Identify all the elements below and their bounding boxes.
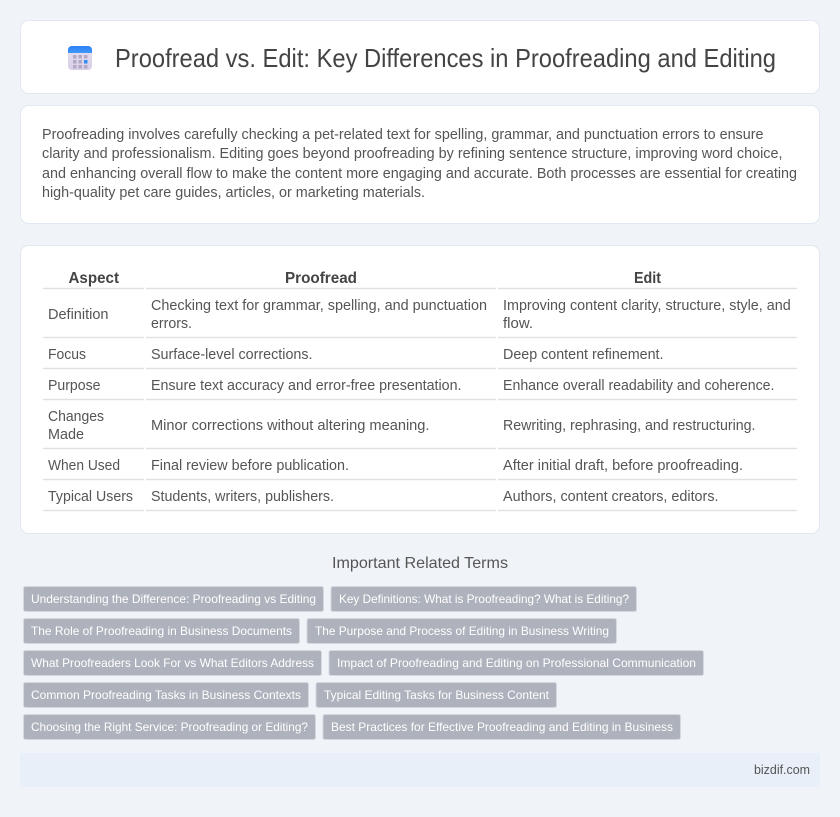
row: definition: errors.	[151, 316, 192, 332]
row: purpose: Ensure text accuracy and error-free presentation.	[151, 378, 462, 394]
tag row 1	[24, 586, 636, 612]
tag row 5	[24, 714, 680, 740]
panel: comparison table	[20, 246, 820, 534]
panel: introduction: and enhancing overall flow to make the content more engaging and accurate. Both processes are essential for creating	[42, 166, 797, 182]
table header: Proofread	[285, 270, 357, 287]
icon: calendar	[68, 46, 92, 70]
row: focus: Focus	[48, 347, 86, 363]
footer: bizdif.com	[754, 762, 810, 777]
tag row 1: Understanding the Difference: Proofreading vs Editing	[31, 592, 316, 606]
row: when used: When Used	[48, 458, 120, 474]
tag row 2: The Role of Proofreading in Business Documents	[31, 624, 292, 638]
title: Proofread vs. Edit: Key Differences in Proofreading and Editing	[115, 45, 776, 73]
table header: Aspect	[68, 270, 120, 287]
row: changes made	[48, 409, 756, 443]
row: typical users	[48, 489, 718, 505]
row: purpose: Purpose	[48, 378, 100, 394]
row: focus	[48, 347, 664, 363]
tag row 4: Typical Editing Tasks for Business Content	[324, 688, 550, 702]
heading: important related terms: Important Related Terms	[332, 555, 508, 572]
row: definition: Checking text for grammar, spelling, and punctuation	[151, 298, 487, 314]
panel: introduction: Proofreading involves carefully checking a pet-related text for spelling, grammar, and punctuation errors to ensure	[42, 127, 764, 143]
tag row 5: Best Practices for Effective Proofreading and Editing in Business	[331, 720, 673, 734]
table header	[68, 270, 662, 287]
row: focus: Surface-level corrections.	[151, 347, 312, 363]
panel: introduction: high-quality pet care guides, articles, or marketing materials.	[42, 185, 425, 201]
row: when used	[48, 458, 743, 474]
row: changes made: Made	[48, 427, 84, 443]
footer	[20, 753, 820, 787]
tag row 4	[24, 682, 556, 708]
row: definition: Definition	[48, 307, 108, 323]
row: definition	[48, 298, 791, 332]
tag row 3	[24, 650, 704, 676]
row: purpose	[48, 378, 774, 394]
row: focus: Deep content refinement.	[503, 347, 664, 363]
row: typical users: Typical Users	[48, 489, 133, 505]
row: changes made: Minor corrections without altering meaning.	[151, 418, 430, 434]
tag row 2: The Purpose and Process of Editing in Business Writing	[315, 624, 609, 638]
related term tags	[24, 586, 704, 740]
row: typical users: Authors, content creators, editors.	[503, 489, 718, 505]
table header: Edit	[634, 270, 662, 287]
row: purpose: Enhance overall readability and coherence.	[503, 378, 774, 394]
header panel	[20, 20, 820, 94]
row: when used: Final review before publication.	[151, 458, 349, 474]
panel: introduction: clarity and professionalism. Editing goes beyond proofreading by refining sentence structure, improving word choice,	[42, 146, 782, 162]
row: typical users: Students, writers, publishers.	[151, 489, 334, 505]
tag row 3: Impact of Proofreading and Editing on Professional Communication	[337, 656, 696, 670]
row: definition: Improving content clarity, structure, style, and	[503, 298, 791, 314]
tag row 3: What Proofreaders Look For vs What Editors Address	[31, 656, 314, 670]
tag row 2	[24, 618, 616, 644]
row: changes made: Rewriting, rephrasing, and restructuring.	[503, 418, 756, 434]
tag row 4: Common Proofreading Tasks in Business Contexts	[31, 688, 301, 702]
panel: introduction	[20, 106, 820, 224]
row: definition: flow.	[503, 316, 533, 332]
tag row 5: Choosing the Right Service: Proofreading or Editing?	[31, 720, 308, 734]
tag row 1: Key Definitions: What is Proofreading? What is Editing?	[339, 592, 629, 606]
row: when used: After initial draft, before proofreading.	[503, 458, 743, 474]
row: changes made: Changes	[48, 409, 104, 425]
